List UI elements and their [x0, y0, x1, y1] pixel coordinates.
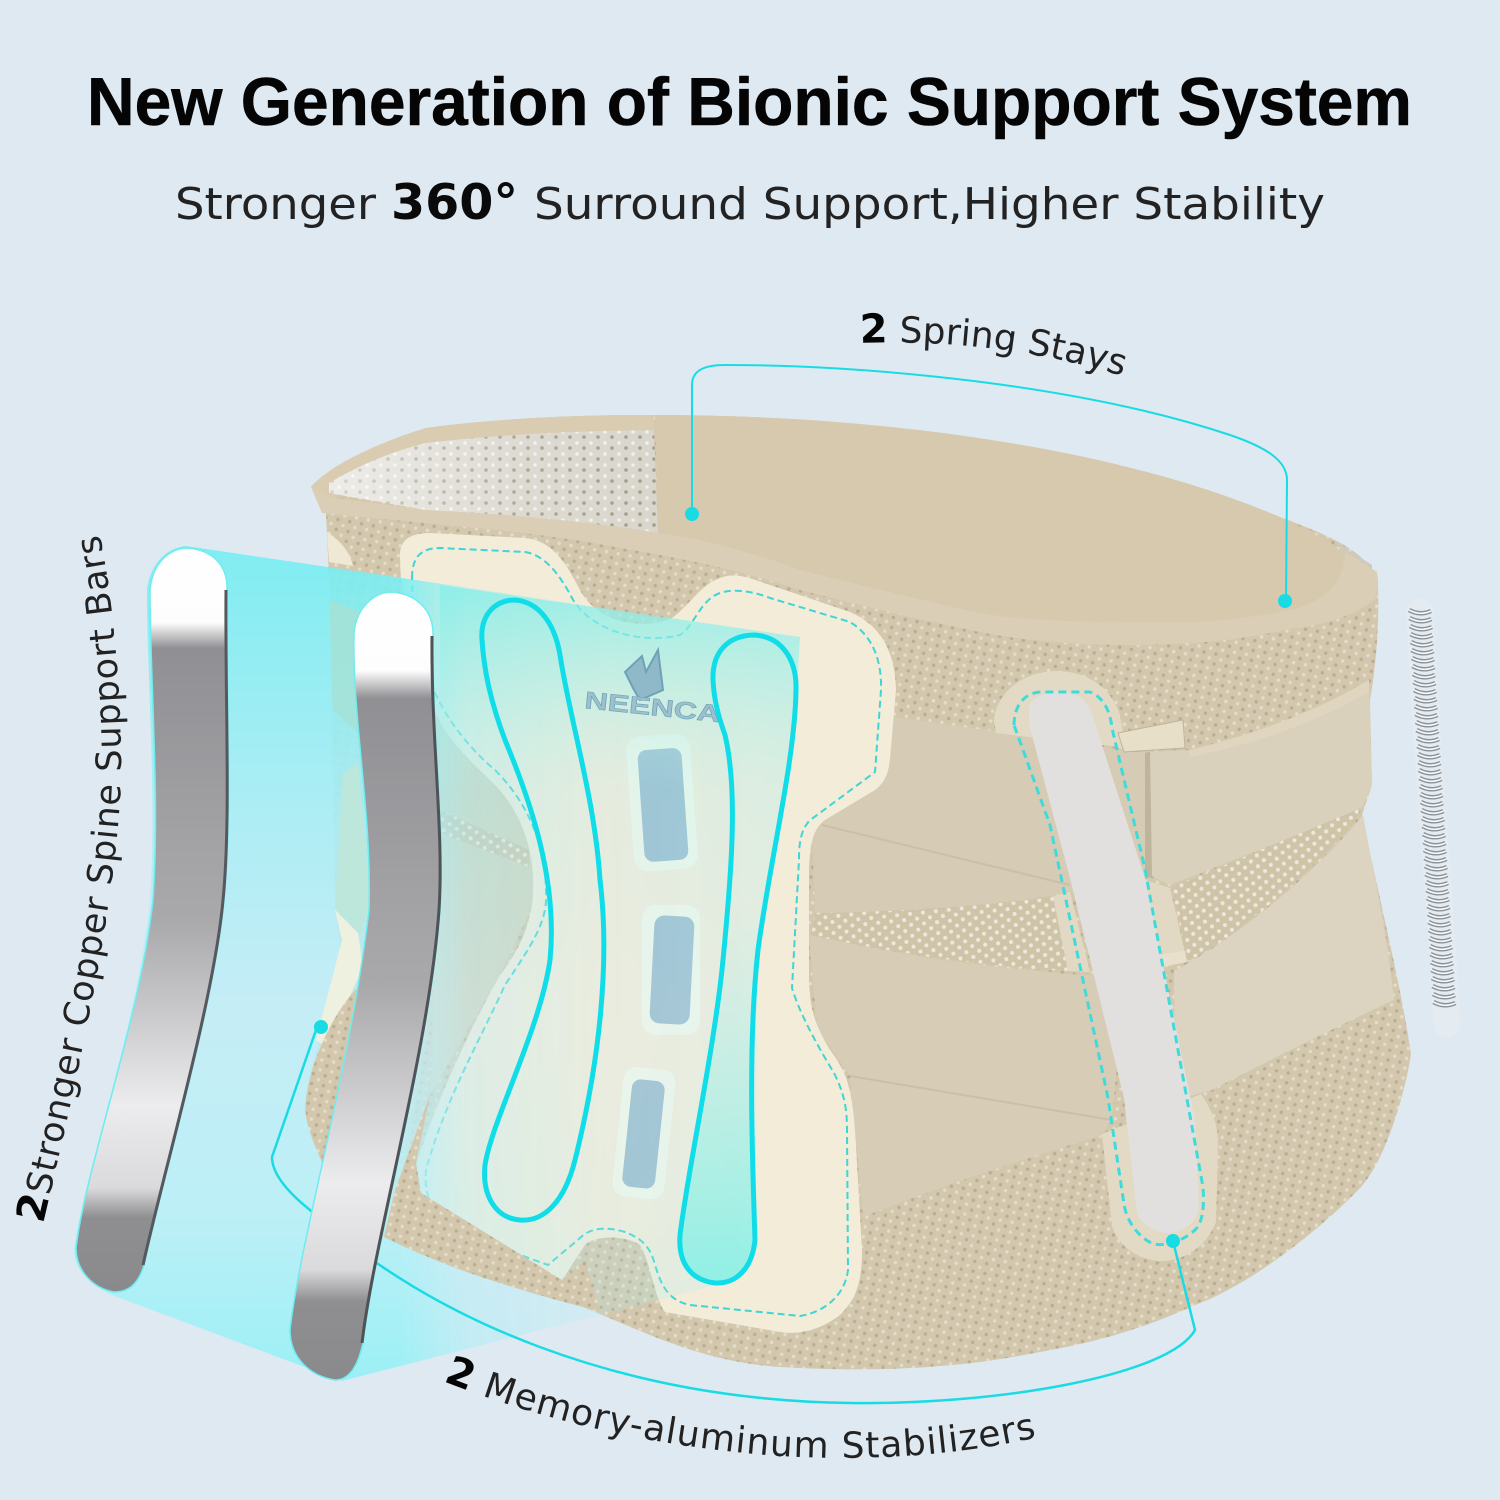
spine slot left [482, 600, 604, 1220]
lower belt edge over beam [384, 1095, 600, 1312]
spring coils [1409, 610, 1456, 1010]
cream upper tab [327, 532, 353, 566]
logo word: NEENCA [583, 687, 721, 728]
back brace [305, 415, 1411, 1369]
subtitle [175, 174, 1325, 231]
pad top frame [625, 733, 699, 872]
right slot glow [680, 635, 796, 1283]
callout dot left [685, 507, 699, 521]
pad bottom fill [621, 1079, 666, 1189]
spring stay [1409, 610, 1456, 1024]
title: New Generation of Bionic Support System [87, 64, 1412, 140]
inner mesh highlight [329, 430, 658, 533]
buckle [1118, 720, 1185, 752]
label: stabilizers: 2 Memory-aluminum Stabilizers [446, 1356, 1034, 1458]
inner back mesh [329, 430, 658, 533]
right bar dark edge [362, 636, 440, 1343]
callout dot lower right [1166, 1234, 1180, 1248]
stabilizer stitching [1014, 692, 1203, 1245]
strap crease upper [822, 825, 1070, 885]
copper support bar left [76, 548, 228, 1292]
top rim binding [311, 487, 1378, 645]
mesh window left [811, 896, 1068, 971]
callout: spring stays [685, 365, 1292, 608]
inner smooth lining [655, 415, 1345, 623]
strap behind plate [430, 700, 540, 1093]
strap binding [1190, 680, 1369, 757]
left lower belt mesh over beam [305, 987, 372, 1190]
stabilizer lower plate [1102, 1094, 1218, 1261]
spine slot right [680, 635, 796, 1283]
loop tab left [1053, 892, 1090, 972]
teal top wash over plate [440, 585, 800, 790]
callout: stabilizers [272, 1020, 1195, 1403]
loop tab right [1145, 880, 1187, 965]
copper support bar right [290, 592, 441, 1380]
pad bottom [611, 1066, 677, 1200]
upper strap left [812, 715, 1145, 913]
spring highlight [1409, 610, 1456, 1010]
callout dot left [314, 1020, 328, 1034]
stabilizer bar [1029, 691, 1199, 1233]
strap fold near buckle [1145, 752, 1152, 880]
spring casing [1420, 612, 1447, 1024]
cream tab [316, 910, 363, 1047]
left bar body [76, 548, 228, 1292]
pad bottom frame [611, 1066, 677, 1200]
right stabilizer plate [994, 671, 1218, 1261]
left bar dark edge [143, 590, 227, 1265]
plate body [400, 533, 896, 1333]
green side strap [335, 763, 370, 935]
central support plate [400, 533, 896, 1333]
teal projection beam [74, 546, 800, 1381]
left mesh window strap [440, 810, 529, 867]
right bar body [290, 592, 441, 1380]
pad top fill [637, 748, 689, 862]
mesh window right [1172, 808, 1361, 962]
label: copper bars: 2Stronger Copper Spine Support Bars [16, 536, 128, 1221]
pad top [625, 733, 699, 872]
top binding [311, 415, 654, 500]
callout dot right [1278, 594, 1292, 608]
belt body mesh [305, 415, 1411, 1369]
plate stitching [412, 548, 881, 1316]
logo mark [625, 650, 663, 700]
subtitle: 360° [391, 174, 518, 231]
pad middle frame [642, 905, 700, 1035]
stabilizer top plate [994, 671, 1126, 750]
small tab [1124, 951, 1187, 975]
lower strap left [809, 935, 1125, 1217]
pad middle fill [649, 915, 695, 1025]
green hook tab [329, 600, 360, 735]
left tabs seen through beam [316, 532, 370, 1047]
subtitle: Surround Support,Higher Stability [534, 179, 1325, 230]
upper strap right [1150, 680, 1372, 885]
lower strap right [1174, 815, 1394, 1100]
pad middle [642, 905, 700, 1035]
strap crease lower [850, 1076, 1112, 1120]
logo [583, 650, 721, 728]
subtitle: Stronger [175, 179, 377, 230]
label: spring stays: 2 Spring Stays [862, 312, 1126, 374]
inner right mesh sliver [1335, 545, 1372, 610]
